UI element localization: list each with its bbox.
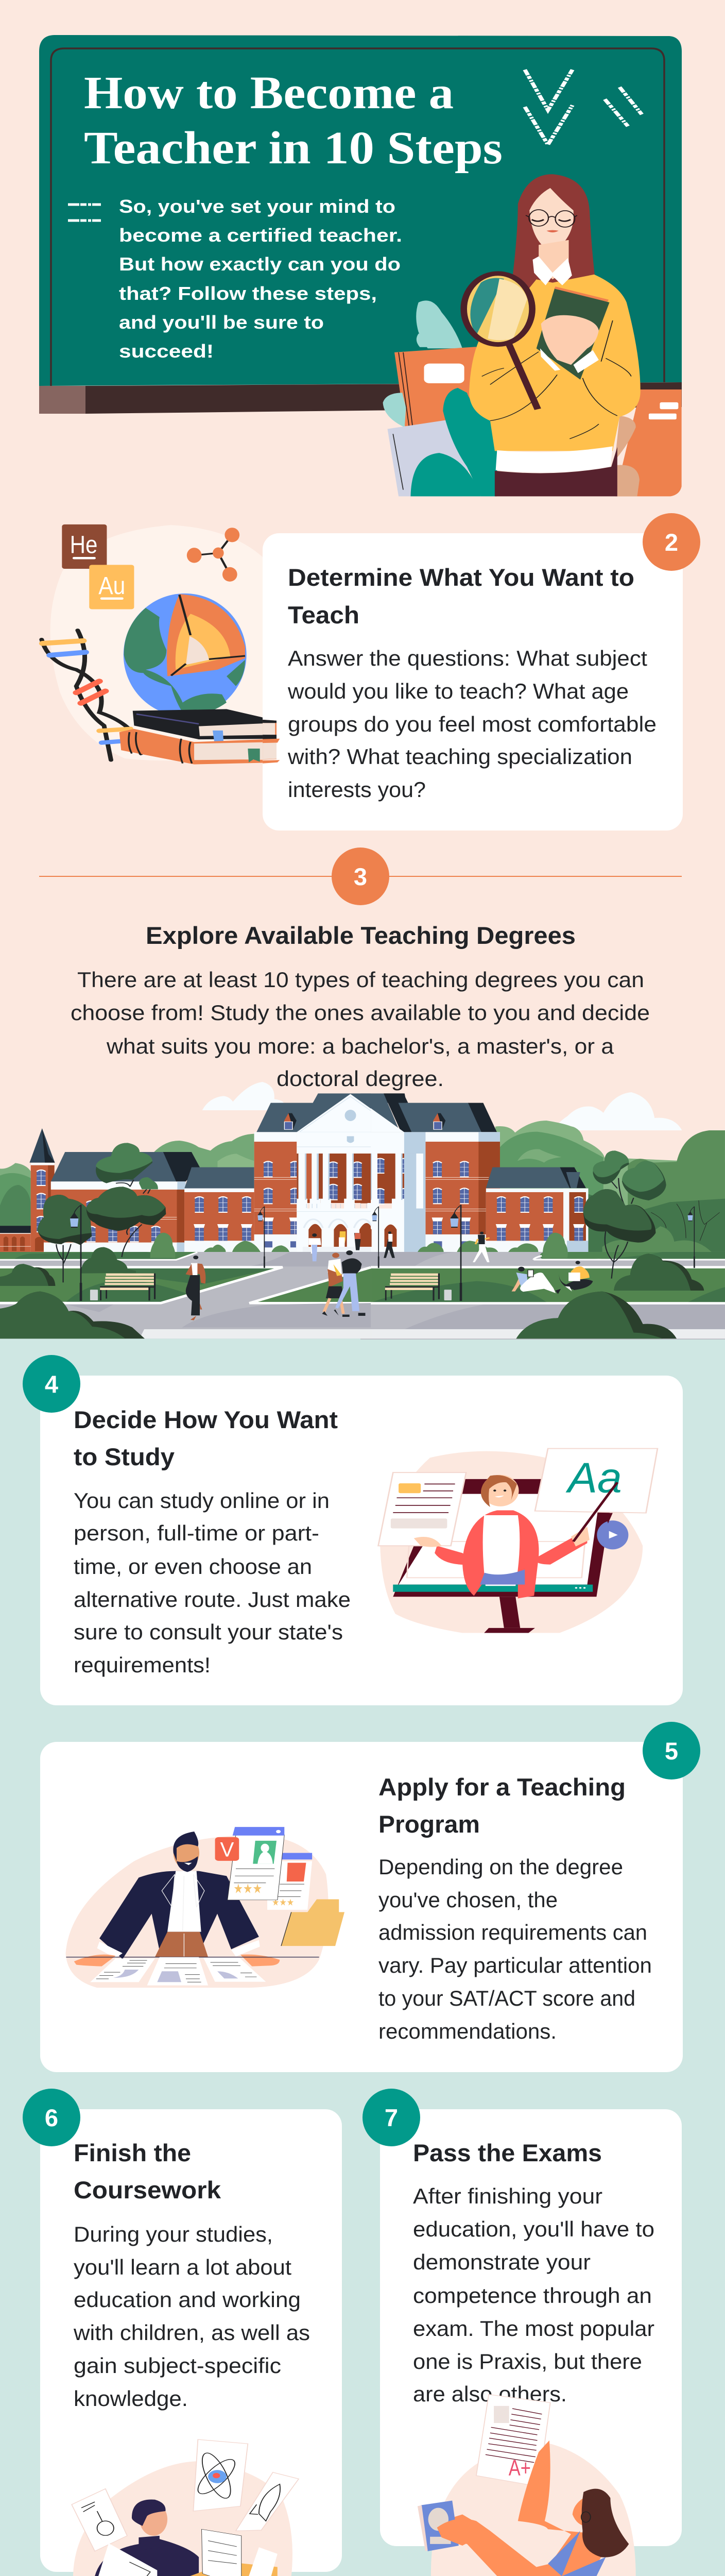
text: step 2: interests you? bbox=[288, 777, 426, 802]
paper: atom bbox=[192, 2439, 248, 2511]
text: step 5: vary. Pay particular attention bbox=[378, 1953, 652, 1977]
badge: 6: 6 bbox=[45, 2104, 58, 2131]
icon: Au element card bbox=[89, 565, 134, 609]
intro text bbox=[119, 196, 402, 362]
paper: rocket bbox=[236, 2472, 299, 2531]
dress bbox=[548, 2531, 606, 2576]
small wing right bbox=[486, 1189, 588, 1252]
intro text: But how exactly can you do bbox=[119, 253, 401, 275]
icon: He element card bbox=[62, 524, 107, 569]
resumes on desk bbox=[90, 1957, 266, 1986]
icon: folder bbox=[281, 1899, 344, 1946]
ground left bbox=[0, 1252, 371, 1338]
text: step 5: Depending on the degree bbox=[378, 1855, 623, 1879]
intro text: and you'll be sure to bbox=[119, 312, 324, 333]
text: step 5: recommendations. bbox=[378, 2019, 557, 2043]
illustration: applicant reviewing resumes: ★★★ bbox=[233, 1881, 262, 1896]
text: step 7: competence through an bbox=[413, 2283, 652, 2308]
tower bbox=[31, 1163, 55, 1252]
resume cards bbox=[267, 1853, 312, 1910]
heading: step 4: to Study bbox=[74, 1443, 175, 1470]
bushes at building left bbox=[150, 1233, 289, 1258]
text: step 7 bbox=[413, 2184, 654, 2406]
text: step 7: are also others. bbox=[413, 2382, 567, 2406]
text: step 2: groups do you feel most comfortable bbox=[288, 712, 657, 736]
paper: flask bbox=[72, 2489, 127, 2551]
open book bbox=[172, 2562, 278, 2576]
illustration: student reading bbox=[72, 2439, 299, 2576]
plants and folders behind teacher bbox=[383, 300, 682, 496]
intro text: succeed! bbox=[119, 341, 214, 362]
heading: step 4: Decide How You Want bbox=[74, 1406, 338, 1433]
text: step 7: exam. The most popular bbox=[413, 2316, 654, 2341]
badge: 3 bbox=[332, 848, 389, 905]
text: step 5: to your SAT/ACT score and bbox=[378, 1986, 635, 2010]
cloud left bbox=[202, 1082, 284, 1110]
blob bbox=[50, 525, 264, 760]
text: step 5: you've chosen, the bbox=[378, 1888, 558, 1912]
text: step 4: alternative route. Just make bbox=[74, 1587, 351, 1612]
central left wing bbox=[256, 1103, 313, 1132]
people bbox=[185, 1231, 365, 1320]
text: step 7: one is Praxis, but there bbox=[413, 2349, 642, 2374]
background: mint section bbox=[0, 1338, 725, 2576]
text: step 2: Answer the questions: What subject bbox=[288, 646, 647, 670]
heading: step 6: Coursework bbox=[74, 2176, 221, 2204]
bushes at building bbox=[418, 1233, 568, 1258]
main building right wing bbox=[384, 1093, 408, 1103]
text: step 5 bbox=[378, 1855, 652, 2043]
text: step 2: would you like to teach? What age bbox=[287, 679, 629, 703]
badge: 4 bbox=[23, 1355, 80, 1413]
title: How to Become a bbox=[84, 67, 454, 118]
text: step 6: with children, as well as bbox=[73, 2320, 310, 2345]
illustration: campus right half bbox=[360, 1092, 725, 1340]
woman bbox=[462, 1510, 539, 1598]
text: step 4: person, full-time or part- bbox=[74, 1521, 319, 1545]
heading: step 2 bbox=[288, 564, 634, 629]
heading: step 2: Determine What You Want to bbox=[288, 564, 634, 591]
divider: step 3 bbox=[39, 848, 682, 905]
text: step 4 bbox=[74, 1488, 351, 1677]
intro text: become a certified teacher. bbox=[119, 225, 402, 246]
text: doctoral line on top of illustration: doctoral degree. bbox=[277, 1066, 444, 1091]
resume cards: ★★★ bbox=[272, 1897, 294, 1908]
teacher figure bbox=[464, 174, 641, 496]
main left wing bbox=[51, 1152, 177, 1181]
paper bbox=[476, 2395, 550, 2486]
text: step 7: education, you'll have to bbox=[413, 2217, 654, 2241]
text: step 6: gain subject-specific bbox=[74, 2353, 281, 2378]
icon: chalk bullet marks bbox=[68, 205, 101, 221]
step 2 illustration: science bbox=[42, 524, 280, 765]
intro text: that? Follow these steps, bbox=[119, 283, 377, 304]
hair and face bbox=[573, 2498, 590, 2526]
man bbox=[99, 1871, 259, 1959]
icon: He element card: He bbox=[70, 530, 97, 558]
panel: step 6 card bbox=[40, 2109, 342, 2572]
heading: step 6: Finish the bbox=[74, 2139, 191, 2166]
heading: step 2: Teach bbox=[288, 601, 359, 629]
icon: Au element card: Au bbox=[98, 571, 125, 600]
illustration: chalk checkmarks and teacher bbox=[383, 70, 682, 496]
text: step 3 bbox=[71, 968, 650, 1058]
text: step 4: requirements! bbox=[74, 1653, 211, 1677]
text: step 7: After finishing your bbox=[413, 2184, 602, 2208]
text: step 5: admission requirements can bbox=[378, 1920, 647, 1944]
heading: step 5 bbox=[378, 1773, 626, 1838]
badge: 2: 2 bbox=[665, 529, 678, 556]
text: step 6: education and working bbox=[74, 2287, 301, 2312]
bush lawn right bbox=[614, 1253, 704, 1291]
text: step 3: There are at least 10 types of teaching degrees you can bbox=[77, 968, 644, 992]
trees left bbox=[56, 1180, 150, 1282]
icon: stacked books bbox=[119, 709, 280, 765]
badge: 7 bbox=[362, 2089, 420, 2146]
bottom-left bush bbox=[0, 1292, 145, 1338]
icon: book in hand bbox=[418, 2501, 459, 2551]
title: Teacher in 10 Steps bbox=[84, 123, 503, 174]
intro text: So, you've set your mind to bbox=[119, 196, 395, 217]
paper right with letters bbox=[535, 1449, 658, 1513]
bottom bush right bbox=[516, 1292, 677, 1338]
benches, lamps bbox=[100, 1274, 156, 1300]
text: step 3: what suits you more: a bachelor's, a master's, or a bbox=[106, 1034, 614, 1058]
paper: A+ bbox=[509, 2456, 531, 2481]
illustration: online teacher on monitor: Aa bbox=[566, 1454, 622, 1501]
icon: DNA helix bbox=[42, 630, 141, 760]
text: step 6 bbox=[73, 2222, 310, 2411]
title bbox=[84, 67, 503, 174]
magnifying glass bbox=[464, 274, 538, 409]
text: step 4: sure to consult your state's bbox=[74, 1620, 343, 1644]
text: step 4: You can study online or in bbox=[74, 1488, 330, 1513]
ground right bbox=[360, 1252, 725, 1340]
panel: step 2 card bbox=[263, 533, 683, 831]
text: step 6: you'll learn a lot about bbox=[74, 2255, 291, 2279]
text: step 7: demonstrate your bbox=[413, 2250, 591, 2274]
text: step 2: with? What teaching specialization bbox=[287, 744, 632, 769]
panel: step 7 card bbox=[380, 2109, 682, 2546]
text: step 6: knowledge. bbox=[74, 2386, 188, 2411]
illustration: campus left half bbox=[0, 1082, 371, 1338]
student bbox=[89, 2539, 199, 2576]
heading: step 3: Explore Available Teaching Degrees bbox=[146, 922, 576, 949]
icon: globe with cut-away core bbox=[124, 594, 247, 716]
arm and body bbox=[442, 2441, 601, 2576]
heading: step 4 bbox=[74, 1406, 338, 1470]
panel: step 5 card bbox=[40, 1742, 683, 2072]
icon: V badge: V bbox=[220, 1838, 234, 1861]
background: top peach bbox=[0, 0, 725, 1338]
illustration: online teacher on monitor bbox=[378, 1449, 658, 1633]
people on path bbox=[384, 1231, 593, 1294]
badge: 3: 3 bbox=[354, 863, 367, 890]
heading: step 7: Pass the Exams bbox=[413, 2139, 602, 2166]
heading: step 6 bbox=[74, 2139, 221, 2204]
badge: 7: 7 bbox=[385, 2104, 398, 2131]
trees right bbox=[583, 1150, 666, 1279]
badge: 5 bbox=[643, 1722, 700, 1780]
text: step 2 bbox=[287, 646, 657, 802]
badge: 4: 4 bbox=[45, 1370, 58, 1398]
text: step 3: choose from! Study the ones available to you and decide bbox=[71, 1001, 650, 1025]
heading: step 5: Apply for a Teaching bbox=[378, 1773, 626, 1801]
illustration: woman with exam paper bbox=[418, 2395, 636, 2576]
icon: play button bbox=[597, 1520, 628, 1549]
icon: molecule bbox=[187, 528, 239, 582]
bench, bin, lamps bbox=[385, 1274, 440, 1300]
books overlap on card bbox=[263, 720, 280, 764]
lawn bushes bbox=[80, 1247, 136, 1274]
wing 2 bbox=[184, 1167, 254, 1189]
portico right bbox=[360, 1101, 404, 1132]
portico bbox=[297, 1093, 371, 1132]
text: step 6: During your studies, bbox=[74, 2222, 273, 2246]
icon: chalk marks bbox=[525, 70, 642, 145]
low building bbox=[0, 1226, 31, 1233]
paper left bbox=[378, 1472, 466, 1546]
badge: 6 bbox=[23, 2089, 80, 2146]
background trees bbox=[0, 1163, 31, 1230]
illustration: applicant reviewing resumes bbox=[66, 1827, 344, 1988]
badge: 5: 5 bbox=[665, 1737, 678, 1765]
badge: 2 bbox=[643, 513, 700, 571]
heading: step 5: Program bbox=[378, 1810, 480, 1838]
panel: step 4 card bbox=[40, 1376, 683, 1705]
panel: chalkboard header bbox=[39, 35, 682, 414]
glasses and face details bbox=[526, 210, 577, 227]
text: step 4: time, or even choose an bbox=[74, 1554, 312, 1579]
